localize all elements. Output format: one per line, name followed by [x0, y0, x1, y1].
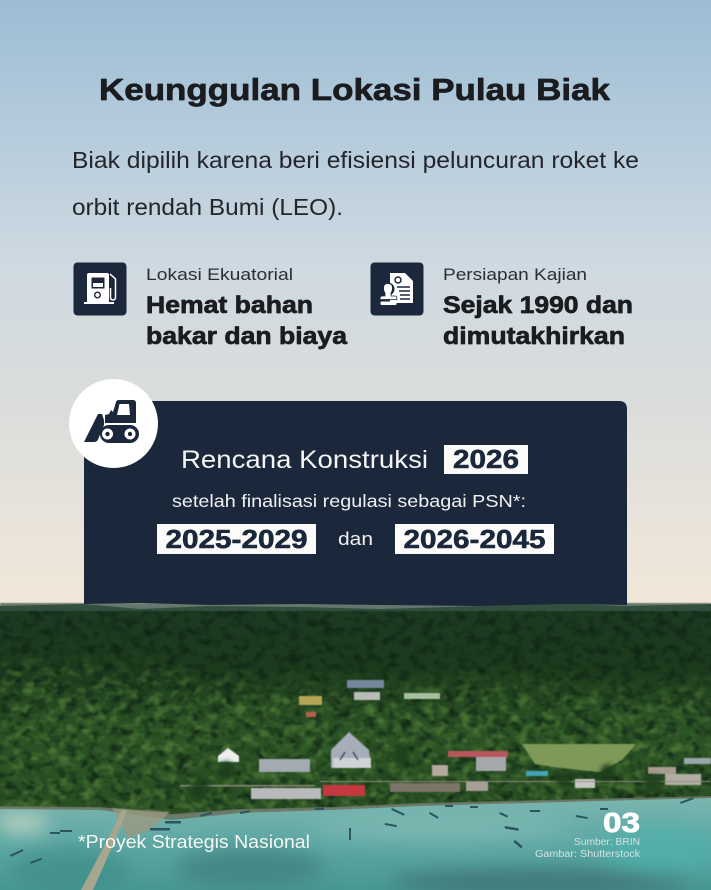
source credits: Gambar: Shutterstock — [535, 849, 641, 860]
icon: bulldozer badge — [69, 379, 158, 468]
item: persiapan kajian — [370, 262, 633, 350]
label: Lokasi Ekuatorial — [146, 265, 293, 284]
source credits: Sumber: BRIN — [574, 837, 640, 848]
highlight: 2026 — [444, 444, 528, 474]
connector word: dan — [338, 529, 373, 549]
label: Persiapan Kajian — [443, 265, 587, 284]
title: Keunggulan Lokasi Pulau Biak — [99, 72, 611, 107]
value: dimutakhirkan — [443, 323, 625, 350]
shoreline — [0, 796, 711, 820]
value: Sejak 1990 dan — [443, 292, 633, 319]
panel: rencana konstruksi — [84, 401, 627, 606]
church — [331, 732, 371, 768]
distant treeline — [0, 603, 711, 611]
highlight: 2026: 2026 — [453, 444, 519, 474]
value — [443, 292, 633, 350]
boats — [10, 797, 694, 864]
intro text: Biak dipilih karena beri efisiensi peluncuran roket ke — [72, 147, 639, 173]
heading: Rencana Konstruksi — [181, 446, 428, 474]
beach spit — [112, 808, 170, 838]
subtitle: setelah finalisasi regulasi sebagai PSN*: — [172, 491, 526, 511]
intro text — [72, 147, 639, 220]
upper village buildings — [299, 680, 440, 717]
highlight: 2025-2029: 2025-2029 — [166, 524, 308, 554]
page number: 03 — [603, 807, 640, 838]
value — [146, 292, 347, 350]
dark trees in village — [190, 747, 662, 800]
highlight: 2026-2045: 2026-2045 — [404, 524, 546, 554]
value: Hemat bahan — [146, 292, 313, 319]
footnote: *Proyek Strategis Nasional — [78, 832, 310, 852]
field — [522, 744, 636, 772]
intro text: orbit rendah Bumi (LEO). — [72, 194, 343, 220]
jetty — [81, 810, 127, 890]
icon: document and stamp — [370, 262, 424, 316]
village buildings — [180, 748, 711, 799]
forest — [0, 604, 711, 815]
icon: fuel pump — [74, 262, 126, 316]
sky background — [0, 0, 711, 606]
sea — [0, 795, 711, 890]
photo: Biak coastline — [0, 603, 711, 890]
source credits — [535, 837, 641, 860]
item: lokasi ekuatorial — [74, 262, 347, 350]
value: bakar dan biaya — [146, 323, 347, 350]
